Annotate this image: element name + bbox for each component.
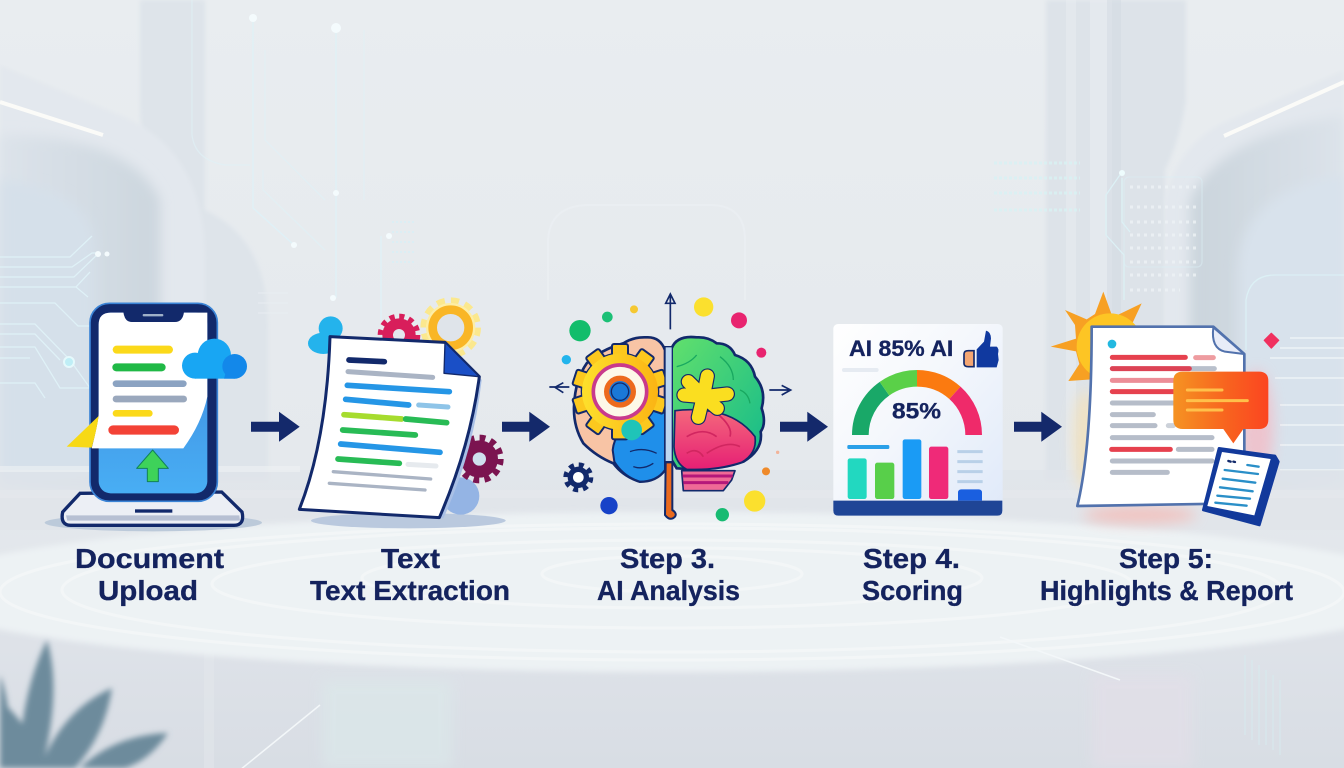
label: step 5 (1040, 543, 1293, 606)
bulb base (682, 471, 735, 491)
left pillar (140, 0, 268, 480)
labels (75, 543, 1293, 606)
lower room (0, 600, 1344, 768)
report page (1077, 327, 1244, 506)
left brain (574, 337, 665, 482)
tablet (1203, 448, 1278, 525)
step 4: scoring dashboard (833, 324, 1003, 516)
card footer (833, 501, 1002, 516)
small gear (567, 466, 590, 489)
label: step 4 (862, 543, 963, 606)
label: step 4: Scoring (862, 575, 963, 606)
yellow splat (684, 376, 727, 417)
gauge value: 85% (892, 398, 941, 423)
right pillars (1046, 0, 1186, 480)
yellow paper fold (67, 416, 99, 448)
centre arch outline (548, 205, 745, 300)
small arrows (549, 294, 791, 395)
arrow 4 (1014, 412, 1062, 442)
label: step 1 (75, 543, 224, 606)
label: step 3 (597, 543, 740, 606)
step 5: highlights and report icon (1051, 292, 1279, 525)
laptop base (62, 492, 243, 525)
text lines (108, 346, 187, 435)
bar chart (847, 439, 983, 501)
cloud (182, 339, 247, 379)
shadow (311, 513, 506, 528)
yellow gear (424, 301, 477, 354)
circular floor (0, 512, 1344, 672)
step 1: document upload icon (45, 303, 262, 531)
upload arrow (137, 450, 168, 482)
score heading: AI 85% AI (849, 336, 953, 361)
label: step 3: Step 3. (620, 543, 715, 574)
pink diamond (1264, 333, 1279, 348)
extracted text lines (329, 360, 449, 490)
base shadow (45, 514, 262, 531)
sun (1051, 292, 1143, 381)
label: step 1: Document (75, 543, 224, 574)
coloured dots (562, 297, 779, 521)
label: step 2 (310, 543, 510, 606)
label: step 5: Step 5: (1119, 543, 1213, 574)
pink lobe (674, 410, 755, 470)
centre divider (665, 347, 672, 462)
circuit lines top left (0, 0, 381, 398)
highlighted lines (1112, 357, 1214, 472)
purple gear (459, 438, 500, 480)
glows (1073, 370, 1273, 524)
arrow 1 (251, 412, 300, 442)
phone (90, 303, 217, 501)
right arch (1165, 70, 1344, 490)
page fold (444, 342, 479, 377)
page side shadow (439, 377, 482, 518)
label: step 2: Text (381, 543, 440, 574)
yellow gear in brain (572, 344, 668, 439)
bullet dot (1108, 340, 1116, 348)
circuit lines right (1106, 172, 1344, 350)
pink gear (381, 317, 417, 353)
comment bubble (1173, 372, 1268, 443)
page fold (1213, 327, 1244, 354)
arrow 2 (502, 412, 550, 442)
blue lobe (613, 400, 665, 482)
label: step 3: AI Analysis (597, 575, 740, 606)
left arch (0, 65, 205, 490)
right brain (672, 337, 764, 469)
orange stem (665, 462, 676, 519)
page (299, 337, 479, 518)
thumbs up (964, 331, 999, 367)
lower wall band (0, 470, 1344, 530)
blue person shape (308, 316, 343, 354)
teal node (621, 420, 642, 440)
label: step 1: Upload (98, 575, 198, 606)
label: step 4: Step 4. (863, 543, 960, 574)
step 2: text extraction icon (299, 301, 506, 528)
step 3: AI brain icon (549, 294, 791, 521)
label: step 5: Highlights & Report (1040, 575, 1293, 606)
label: step 2: Text Extraction (310, 575, 510, 606)
light strips (0, 102, 103, 135)
gauge (860, 378, 974, 435)
background plant (0, 640, 168, 768)
dot-grid left (392, 222, 416, 262)
arrow 3 (780, 412, 828, 442)
card (833, 324, 1003, 516)
